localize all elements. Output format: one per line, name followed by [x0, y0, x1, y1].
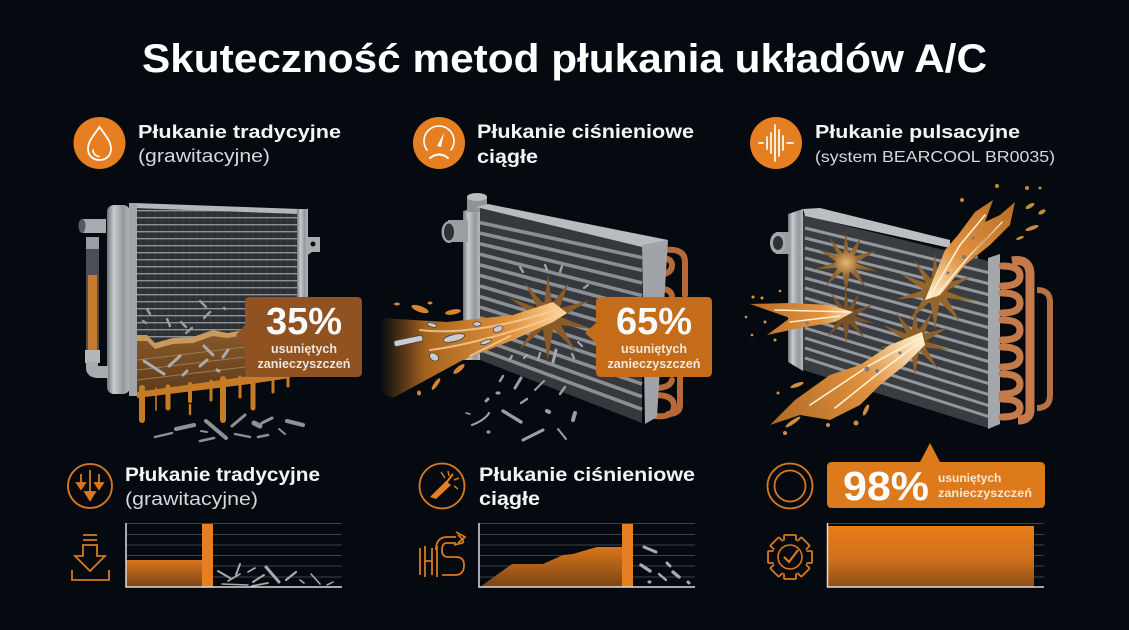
radiator fins	[480, 223, 642, 409]
callout: 98 percent	[827, 443, 1045, 509]
label continued: zanieczyszczeń	[608, 357, 700, 371]
value 35%: 35%	[266, 301, 342, 343]
panel: continuous pressure method header	[413, 117, 694, 169]
heading: Płukanie ciśnieniowe	[479, 464, 695, 486]
sight tube with orange level	[78, 219, 108, 372]
radiator top bar	[803, 208, 950, 248]
icon: gear with check	[768, 535, 812, 579]
subheading: (grawitacyjne)	[125, 488, 258, 509]
left tank	[107, 205, 130, 394]
icon: pulse waveform	[750, 117, 802, 169]
right tank	[297, 209, 308, 301]
pulse jet upper right	[925, 184, 1046, 300]
dirt splat lower	[879, 306, 951, 376]
inlet pipe	[770, 232, 790, 254]
dirt splat upper left	[814, 232, 878, 294]
panel: traditional method header	[74, 117, 341, 169]
inlet pipes	[442, 193, 487, 243]
copper coils	[655, 250, 685, 416]
panel: continuous pressure result	[420, 464, 695, 587]
heading: traditional method: Płukanie tradycyjne	[138, 121, 341, 142]
panel: pulse method header	[750, 117, 1055, 169]
icon: download to tray	[72, 535, 109, 580]
pulse jet left	[745, 290, 853, 342]
icon: H and S pressure flow	[420, 532, 465, 577]
icon: double ring	[768, 464, 812, 508]
icon: water drop	[74, 117, 126, 169]
chart: 65 percent	[479, 523, 695, 587]
panel: traditional method result	[68, 464, 342, 587]
subheading: ciągłe	[479, 488, 540, 510]
fallen debris	[155, 415, 303, 441]
left tank	[463, 207, 480, 360]
icon: spray gun	[420, 464, 464, 508]
pressure jet	[380, 302, 567, 398]
heading: continuous pressure: Płukanie ciśnieniowe	[477, 122, 694, 143]
title: Skuteczność metod płukania układów A/C	[142, 37, 987, 81]
illustration: radiator with continuous pressure jet	[380, 193, 685, 440]
contaminated liquid	[137, 330, 250, 393]
value 65%: 65%	[616, 301, 692, 343]
left tank	[788, 209, 803, 371]
label continued: zanieczyszczeń	[258, 357, 350, 371]
value 98%: 98%	[843, 463, 929, 509]
radiator top bar	[476, 204, 668, 247]
copper outer tube	[1012, 261, 1030, 420]
label continued: zanieczyszczeń	[938, 486, 1032, 500]
label: usuniętych	[621, 342, 687, 356]
radiator fins	[805, 228, 990, 417]
flying particles around core	[510, 265, 588, 362]
copper coils	[1002, 266, 1020, 417]
fallen debris	[466, 376, 575, 440]
radiator core	[480, 207, 642, 423]
subheading: continuous: ciągłe	[477, 147, 538, 168]
subheading: gravity: (grawitacyjne)	[138, 146, 270, 166]
right tank	[988, 254, 1000, 429]
dirt splat left	[817, 288, 875, 344]
panel: pulse method result	[768, 443, 1045, 587]
radiator top bar	[134, 203, 300, 214]
callout: 35 percent	[236, 297, 362, 377]
callout: 65 percent	[585, 297, 712, 377]
subheading: system name: (system BEARCOOL BR0035)	[815, 149, 1055, 166]
mounting bracket	[306, 237, 320, 256]
heading: Płukanie tradycyjne	[125, 465, 320, 486]
copper loop	[1037, 290, 1050, 408]
label: usuniętych	[271, 342, 337, 356]
pulse jet lower	[770, 332, 925, 435]
icon: three arrows down	[68, 464, 112, 508]
orange droplets	[394, 302, 466, 396]
chart: 98 percent	[827, 523, 1044, 587]
right tank	[642, 240, 668, 424]
chart: 35 percent	[126, 523, 342, 587]
radiator core	[136, 208, 297, 396]
radiator core	[803, 215, 992, 428]
label: usuniętych	[938, 471, 1001, 485]
illustration: radiator with gravity flush	[78, 203, 320, 441]
icon: pressure gauge	[413, 117, 465, 169]
illustration: radiator with pulse flush	[745, 184, 1050, 435]
debris within jets	[805, 236, 978, 373]
dirt splat upper right	[896, 253, 974, 329]
dirt splash on core	[504, 274, 592, 360]
dripping liquid	[137, 374, 290, 420]
heading: pulse: Płukanie pulsacyjne	[815, 121, 1020, 142]
debris floating above liquid	[143, 301, 225, 333]
